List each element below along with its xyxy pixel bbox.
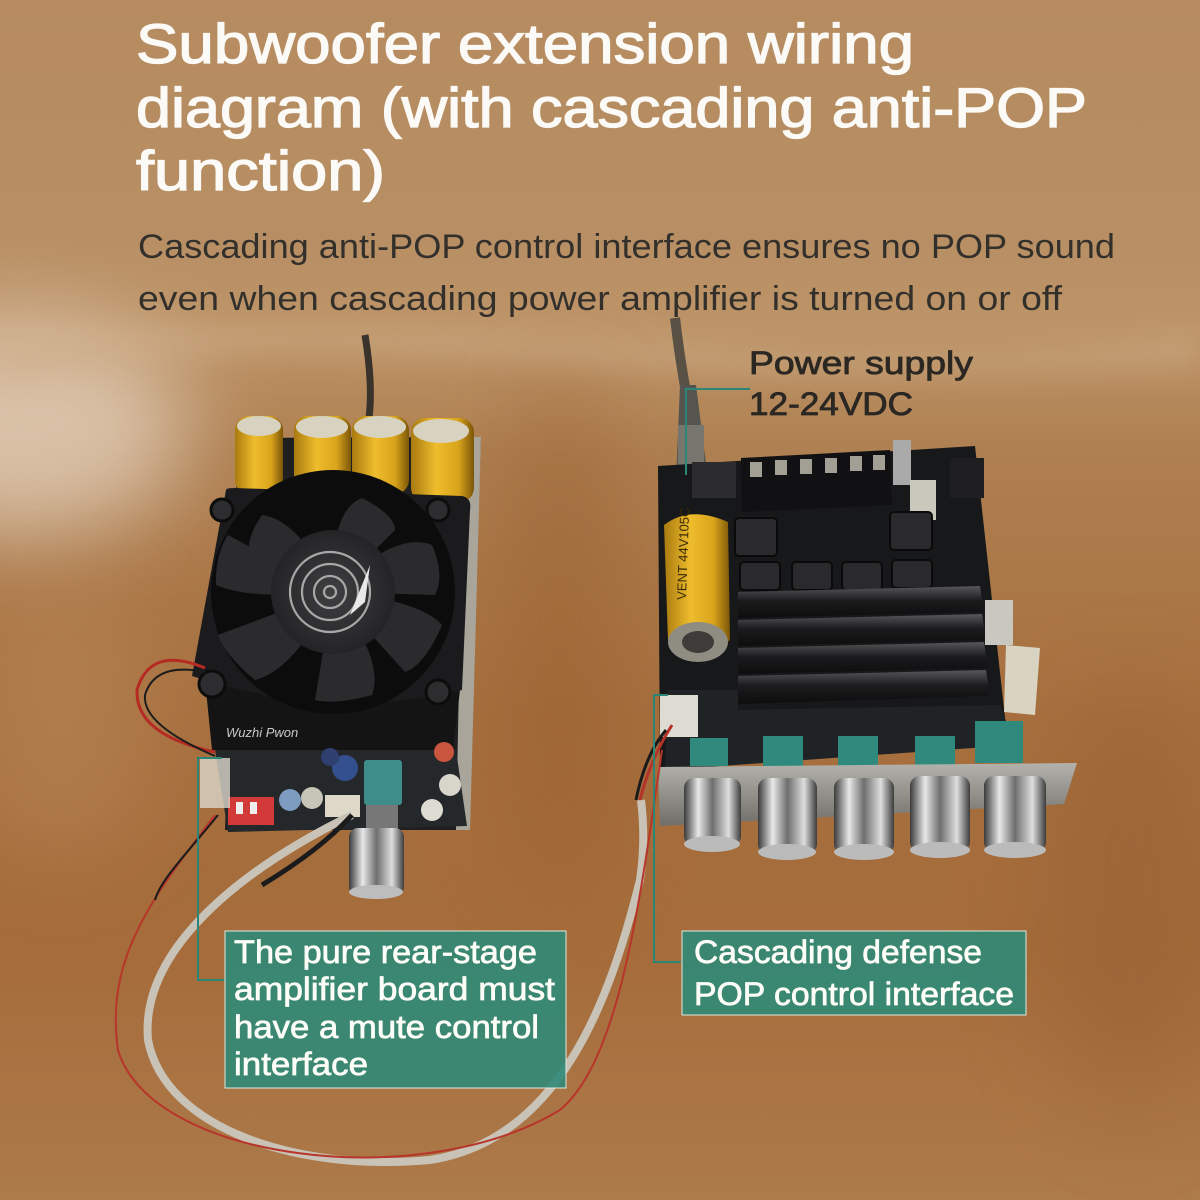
yellow capacitor bbox=[664, 507, 730, 662]
lower circuit board bbox=[215, 750, 467, 832]
title bbox=[136, 12, 1087, 202]
white connectors bbox=[1004, 645, 1040, 715]
power supply label bbox=[686, 345, 973, 475]
callout: mute control interface: The pure rear-stage bbox=[234, 934, 537, 970]
DC jack and corner components bbox=[692, 462, 736, 498]
metal front panel bbox=[658, 763, 1077, 826]
board base bbox=[225, 437, 481, 830]
left amplifier board bbox=[137, 335, 481, 899]
board bbox=[658, 446, 1008, 770]
title: Subwoofer extension wiring bbox=[136, 12, 914, 75]
leader line: left callout to mute interface bbox=[198, 758, 225, 980]
heatsink bbox=[205, 680, 460, 758]
callout: mute control interface bbox=[225, 931, 566, 1088]
title: function) bbox=[136, 139, 385, 202]
leader line: right callout to cascade interface bbox=[654, 695, 681, 962]
subtitle: Cascading anti-POP control interface ensures no POP sound bbox=[138, 228, 1115, 266]
yellow capacitor: VENT 44V105C bbox=[674, 507, 692, 600]
heatsink fins bbox=[738, 586, 990, 704]
power supply label: 12-24VDC bbox=[749, 386, 913, 422]
heatsink brand text: Wuzhi Pwon bbox=[226, 725, 298, 740]
callout: mute control interface: have a mute control bbox=[234, 1009, 539, 1045]
screw terminal bbox=[741, 450, 892, 512]
volume knob bbox=[349, 760, 404, 899]
subtitle bbox=[138, 228, 1115, 318]
right amplifier board bbox=[658, 318, 1077, 860]
callout: mute control interface: amplifier board must bbox=[234, 971, 555, 1007]
inductors bbox=[735, 512, 932, 590]
capacitors bbox=[235, 416, 474, 502]
op-amp board area bbox=[665, 690, 1015, 770]
fan wires bbox=[137, 660, 215, 752]
subtitle: even when cascading power amplifier is turned on or off bbox=[138, 280, 1063, 318]
callout: cascading defense interface bbox=[682, 931, 1026, 1015]
fan bbox=[192, 470, 470, 714]
white cascade connector bbox=[660, 695, 698, 737]
fan hub with logo bbox=[271, 530, 395, 654]
power supply label: Power supply bbox=[749, 345, 973, 381]
connecting cables bbox=[116, 725, 672, 1162]
title: diagram (with cascading anti-POP bbox=[136, 76, 1087, 139]
small components bbox=[200, 742, 461, 825]
callout: cascading defense interface: POP control interface bbox=[694, 976, 1014, 1012]
DC power cable bbox=[675, 318, 708, 480]
chrome knobs bbox=[684, 776, 1046, 860]
callout: cascading defense interface: Cascading defense bbox=[694, 934, 982, 970]
callout: mute control interface: interface bbox=[234, 1046, 368, 1082]
teal potentiometer boxes bbox=[690, 721, 1023, 766]
power cable bbox=[365, 335, 370, 425]
